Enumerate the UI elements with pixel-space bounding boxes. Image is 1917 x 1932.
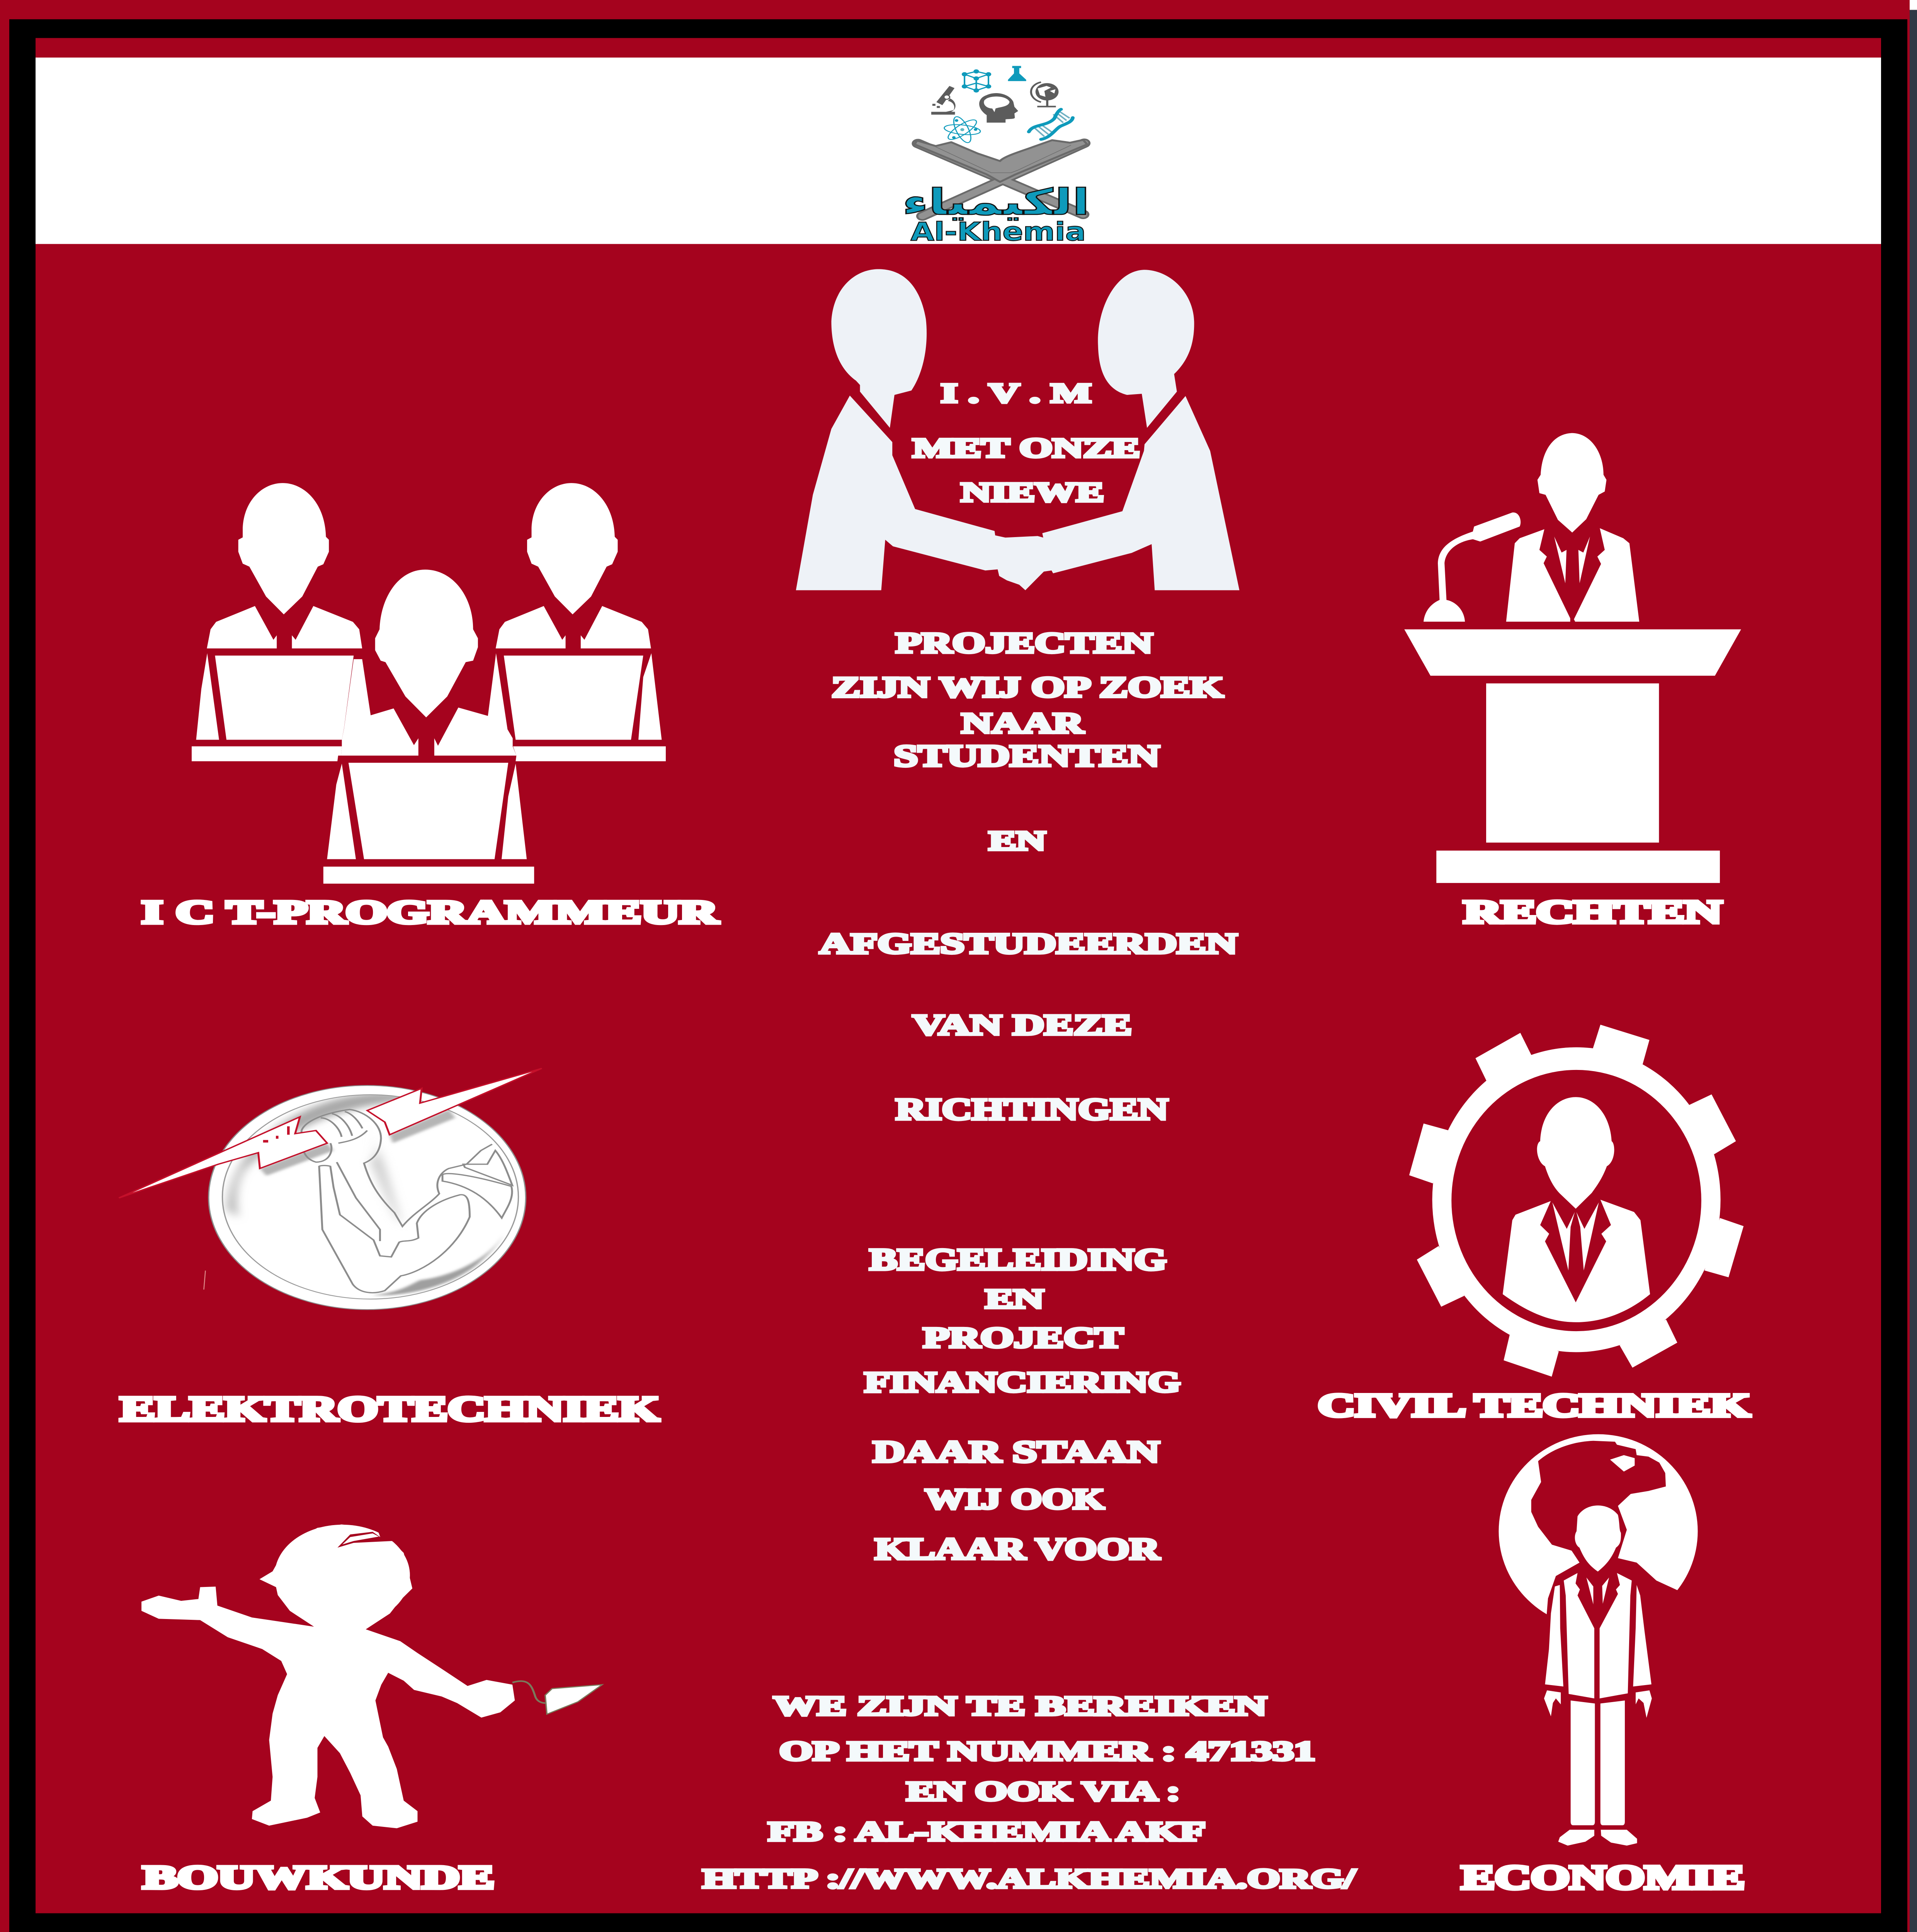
icon: flask: [1008, 66, 1026, 81]
label: ECONOMIE: ECONOMIE: [1461, 1859, 1745, 1896]
text: PROJECT: PROJECT: [923, 1321, 1123, 1354]
text: OP HET NUMMER: OP HET NUMMER : 471331: [779, 1736, 1315, 1766]
text: ZIJN WIJ OP ZOEK: ZIJN WIJ OP ZOEK: [832, 671, 1223, 703]
text: I . V . M: I . V . M: [941, 378, 1091, 408]
label: I C T-PROGRAMMEUR: I C T-PROGRAMMEUR: [142, 894, 719, 930]
icon: molecule cube: [963, 70, 990, 92]
icon: gear with businessman: [1409, 1025, 1744, 1377]
white header band: [36, 58, 1881, 244]
text: WE ZIJN TE BEREIKEN: WE ZIJN TE BEREIKEN: [774, 1690, 1267, 1721]
text: AFGESTUDEERDEN: AFGESTUDEERDEN: [820, 927, 1237, 960]
arm outlines: [301, 1109, 512, 1293]
text: WIJ OOK: WIJ OOK: [925, 1483, 1104, 1515]
label: CIVIL TECHNIEK: CIVIL TECHNIEK: [1318, 1388, 1750, 1423]
text: PROJECTEN: PROJECTEN: [896, 627, 1153, 659]
logo latin wordmark: Al-Khemia: [911, 217, 1086, 246]
icon: construction worker with trowel: [141, 1524, 602, 1828]
text: NAAR: NAAR: [961, 707, 1084, 739]
lightning bolt: [119, 1068, 542, 1198]
icon: businessman in front of globe: [1499, 1434, 1698, 1845]
icon: microscope: [931, 86, 956, 115]
text: FB: FB : AL-KHEMIA AKF: [768, 1816, 1206, 1847]
icon: ICT programmers with laptops: [192, 483, 666, 884]
text: NIEWE: NIEWE: [961, 477, 1104, 507]
left programmer: [192, 483, 362, 761]
text: EN OOK VIA: EN OOK VIA :: [907, 1776, 1180, 1806]
icon: head with brain: [979, 93, 1018, 122]
label: BOUWKUNDE: BOUWKUNDE: [143, 1859, 494, 1896]
text: VAN DEZE: VAN DEZE: [913, 1009, 1132, 1041]
icon: speaker at podium: [1404, 433, 1741, 883]
icon: handshake: [796, 269, 1239, 590]
icon: fist gripping lightning bolt: [119, 1068, 542, 1310]
text: DAAR STAAN: DAAR STAAN: [873, 1435, 1160, 1469]
right programmer: [496, 483, 666, 761]
text: STUDENTEN: STUDENTEN: [894, 739, 1160, 773]
logo: Al-Khemia: [902, 66, 1090, 246]
icon: DNA helix: [1029, 109, 1073, 139]
icon: atom: [943, 115, 981, 144]
label: ELEKTROTECHNIEK: ELEKTROTECHNIEK: [120, 1389, 659, 1429]
text: BEGELEIDING: BEGELEIDING: [869, 1242, 1167, 1277]
text: EN: EN: [989, 825, 1046, 856]
label: RECHTEN: RECHTEN: [1464, 894, 1722, 930]
text: FINANCIERING: FINANCIERING: [864, 1366, 1180, 1398]
icon: book stand: [915, 140, 1087, 216]
text: EN: EN: [985, 1284, 1044, 1314]
center programmer: [323, 570, 534, 884]
icon: globe: [1031, 82, 1058, 107]
text: website: HTTP ://WWW.ALKHEMIA.ORG/: [703, 1863, 1356, 1894]
text: KLAAR VOOR: KLAAR VOOR: [875, 1532, 1160, 1566]
text: MET ONZE: MET ONZE: [913, 433, 1140, 463]
text: RICHTINGEN: RICHTINGEN: [896, 1092, 1168, 1126]
logo arabic wordmark: الكيمياء: [902, 181, 1090, 223]
